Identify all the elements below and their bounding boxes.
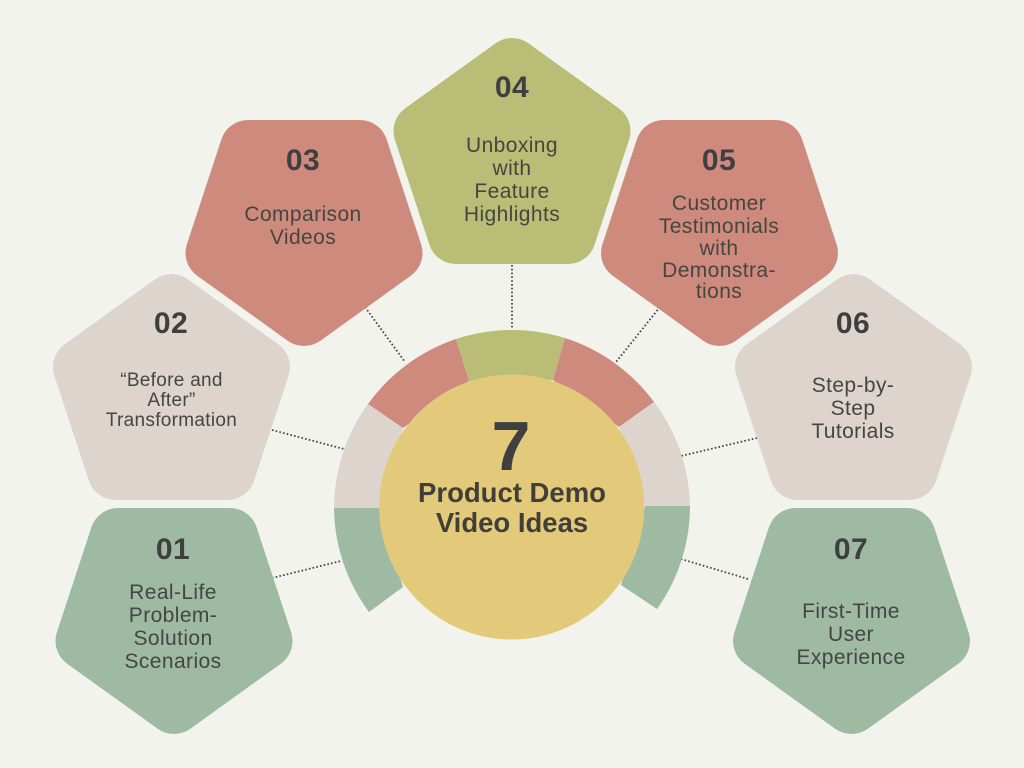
panel: 03: Comparison	[244, 203, 362, 226]
panel: 06: Step-by-	[812, 374, 894, 397]
panel: 06: 06	[836, 307, 870, 340]
panel: 02: “Before and	[120, 370, 223, 391]
panel: 05: Customer	[672, 192, 766, 215]
panel: 01: Solution	[133, 627, 213, 650]
panel: 03: 03	[286, 144, 320, 177]
panel: 06: Step	[831, 397, 875, 420]
panel: 02: 02	[154, 307, 188, 340]
connector: 06	[681, 438, 757, 456]
connector: 01	[272, 561, 341, 578]
connector: 07	[681, 559, 748, 579]
panel: 07	[761, 533, 942, 706]
connector: 03	[365, 307, 405, 362]
panel: 01: Problem-	[129, 604, 217, 627]
panel: 05: with	[699, 237, 738, 260]
panel: 02	[81, 302, 262, 472]
panel: 04: Feature	[474, 180, 550, 203]
center circle: 7	[492, 407, 530, 485]
panel: 07: Experience	[796, 646, 906, 669]
connector: 05	[616, 307, 660, 362]
panel: 01: Scenarios	[125, 650, 221, 673]
panel: 05: Demonstra-	[662, 259, 776, 282]
panel: 07: 07	[834, 533, 868, 566]
panel: 01: Real-Life	[129, 581, 217, 604]
connector: 04	[511, 265, 513, 328]
panel: 05: 05	[702, 144, 736, 177]
panel: 07: First-Time	[802, 600, 900, 623]
panel: 06: Tutorials	[811, 420, 895, 443]
panel: 06	[763, 302, 944, 472]
panel: 04: 04	[495, 71, 529, 104]
connector: 02	[272, 430, 344, 449]
panel: 03	[214, 144, 394, 318]
panel: 04: Highlights	[464, 203, 560, 226]
panel: 05: tions	[696, 280, 742, 303]
center circle: Video Ideas	[436, 507, 588, 538]
panel: 04: with	[492, 157, 531, 180]
panel: 05	[629, 144, 810, 318]
ring segments	[334, 330, 690, 612]
center circle	[379, 374, 644, 640]
center circle: Product Demo	[418, 477, 606, 508]
panel: 01	[84, 533, 264, 706]
panel: 03: Videos	[270, 226, 336, 249]
panel: 02: After”	[147, 390, 196, 411]
panel: 04	[422, 66, 602, 236]
panel: 04: Unboxing	[466, 134, 558, 157]
panel: 05: Testimonials	[659, 215, 779, 238]
panel: 02: Transformation	[106, 410, 237, 431]
panel: 01: 01	[156, 533, 190, 566]
panel: 07: User	[828, 623, 874, 646]
